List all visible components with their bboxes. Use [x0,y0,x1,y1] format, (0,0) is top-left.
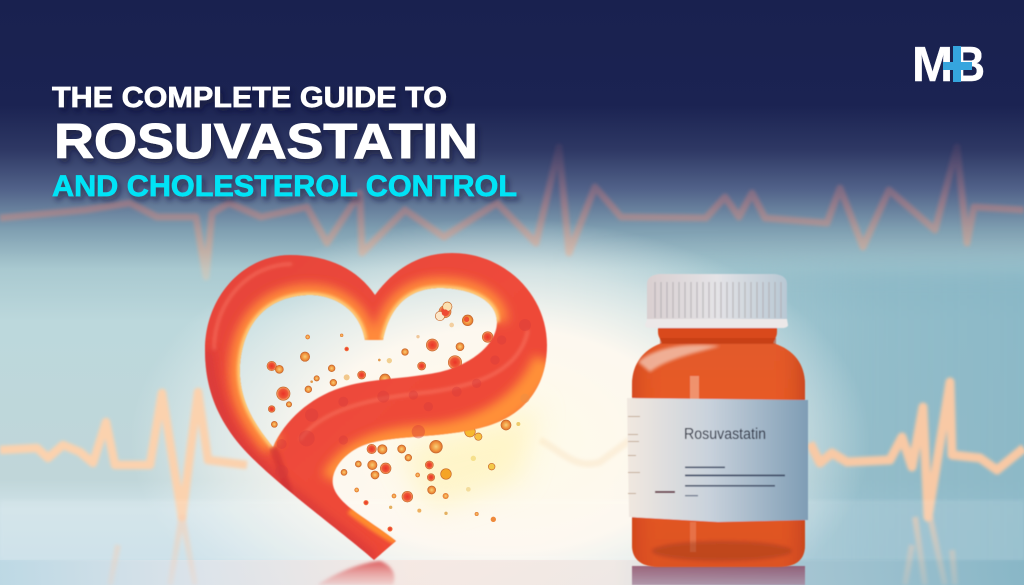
title line 2: ROSUVASTATIN [54,115,478,169]
title line 1: THE COMPLETE GUIDE TO [52,82,447,114]
drug name: Rosuvastatin [684,426,766,443]
side label text lines [628,416,640,494]
heart junction shadow [273,447,290,500]
logo plus [943,46,972,82]
logo [912,38,985,92]
heart glow [400,400,540,510]
heart [200,248,552,564]
floor [0,500,1024,585]
bottle [627,274,808,570]
bottle body [630,340,808,570]
heart tube underside glow [333,360,545,480]
logo letter B: B [954,38,985,92]
heart reflection [317,561,394,585]
lower ECG line left [0,392,247,517]
bottle cap [645,274,788,328]
heart wide orange inner glow [240,288,497,447]
particles on heart tube [275,319,531,478]
faint middle ECG segment [540,440,630,464]
label lines [655,466,785,496]
lower ECG line right [810,382,1024,517]
upper ECG line [0,147,1024,277]
ECG reflections [110,515,955,585]
bottle reflection [632,566,805,585]
title line 3: AND CHOLESTEROL CONTROL [52,170,517,203]
heart tip sheen [350,510,396,541]
heart tube highlight [212,262,530,440]
bottle neck shadow [660,338,776,344]
bottle label [627,398,808,522]
particles behind heart [267,302,520,532]
heart lower edge shadow [207,350,374,560]
heart inner yellow edge [240,288,497,447]
logo letter M: M [912,38,953,92]
title [52,82,517,203]
bottle neck [658,325,777,345]
